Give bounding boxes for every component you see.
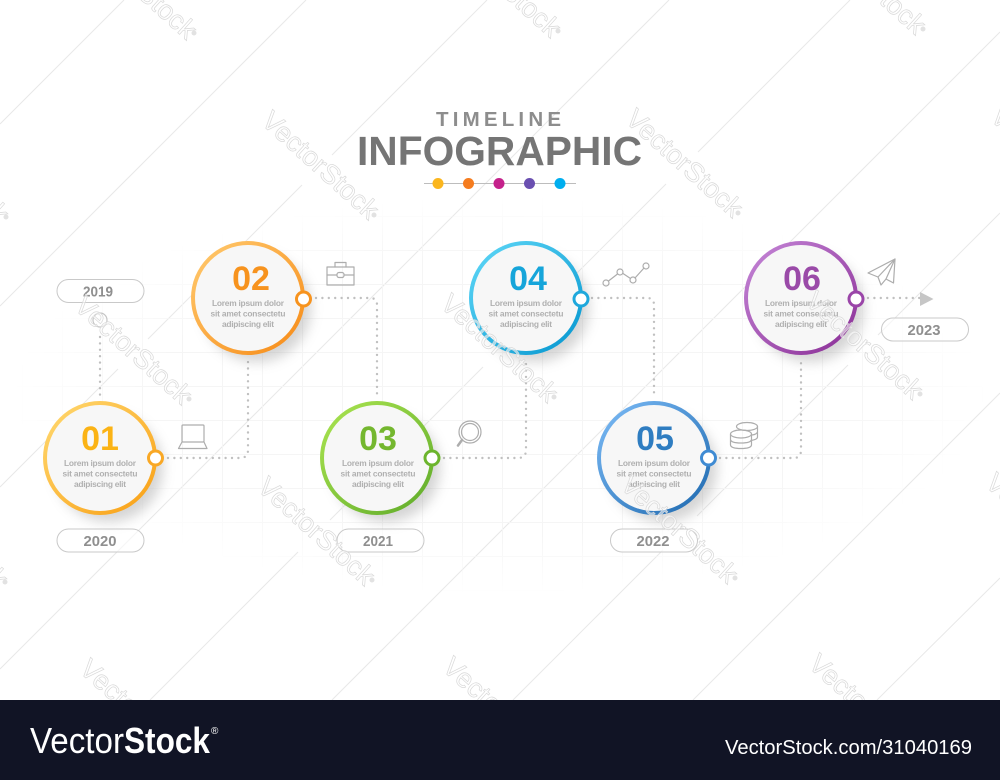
year pill 2023: 2023 (908, 322, 940, 339)
step 04: sit amet consectetu (488, 308, 564, 318)
step 01: adipiscing elit (74, 479, 126, 489)
dotted connector paths (100, 298, 920, 458)
step 03: sit amet consectetu (340, 468, 416, 478)
step 06: Lorem ipsum dolor (765, 298, 838, 308)
step 03 (320, 401, 440, 522)
step 06: adipiscing elit (775, 319, 827, 329)
step 03: Lorem ipsum dolor (342, 458, 415, 468)
step 01: sit amet consectetu (62, 468, 138, 478)
step 04: adipiscing elit (500, 319, 552, 329)
watermarks: VectorStock (800, 285, 929, 405)
watermarks: VectorStock (256, 105, 385, 225)
background grid (102, 246, 865, 557)
step 02: adipiscing elit (222, 319, 274, 329)
icon: laptop (178, 425, 207, 448)
step 06: 06 (783, 260, 821, 298)
footer url: VectorStock.com/31040169 (725, 737, 972, 759)
year pill 2022 (610, 529, 698, 552)
watermarks: VectorStock (435, 288, 564, 408)
step 01 (43, 401, 164, 522)
icon: coins (730, 422, 758, 448)
icon: line chart (603, 263, 649, 286)
step 05: sit amet consectetu (616, 468, 692, 478)
step 03: adipiscing elit (352, 479, 404, 489)
step 01: Lorem ipsum dolor (64, 458, 137, 468)
step 06: sit amet consectetu (764, 308, 838, 318)
step 04: 04 (509, 260, 547, 298)
step 05: adipiscing elit (628, 479, 680, 489)
footer logo (30, 720, 219, 761)
step 04 (469, 241, 590, 362)
watermarks: VectorStock (620, 103, 749, 223)
icon: briefcase (327, 262, 354, 285)
watermarks: VectorStock (74, 653, 203, 773)
arrow head (920, 292, 934, 306)
year pill 2021: 2021 (363, 533, 393, 550)
step 02: Lorem ipsum dolor (212, 298, 285, 308)
step 05: Lorem ipsum dolor (618, 458, 691, 468)
footer bar (0, 700, 1000, 780)
year pill 2020 (57, 529, 144, 552)
small target icon above step 01 (93, 313, 107, 327)
step 02: sit amet consectetu (210, 308, 286, 318)
watermarks: VectorStock (437, 651, 566, 771)
step 04: Lorem ipsum dolor (490, 298, 563, 308)
year pill 2019 (57, 280, 144, 302)
step 05 (597, 401, 717, 522)
watermarks: VectorStock (803, 648, 932, 768)
step 02: 02 (232, 260, 270, 298)
icon: paper plane (868, 259, 895, 285)
watermarks: VectorStock (69, 290, 198, 410)
year pill 2019: 2019 (83, 284, 113, 300)
icon: magnifier (458, 421, 481, 446)
step 01: 01 (81, 420, 119, 458)
step 06 (744, 241, 864, 362)
title dots (424, 178, 576, 189)
step 02 (191, 241, 312, 362)
year pill 2021 (337, 529, 424, 552)
year pill 2020: 2020 (84, 533, 116, 550)
year pill 2023 (882, 318, 968, 341)
watermarks: VectorStock (252, 471, 381, 591)
footer logo: ® (211, 726, 219, 737)
step 05: 05 (636, 420, 674, 458)
step 03: 03 (359, 420, 397, 458)
title: infographic: INFOGRAPHIC (357, 128, 642, 174)
watermarks: VectorStock (615, 469, 744, 589)
year pill 2022: 2022 (636, 533, 670, 550)
footer logo: Vector (30, 720, 124, 761)
title (357, 108, 642, 189)
title: timeline: TIMELINE (436, 108, 561, 131)
footer logo: Stock (124, 720, 211, 761)
